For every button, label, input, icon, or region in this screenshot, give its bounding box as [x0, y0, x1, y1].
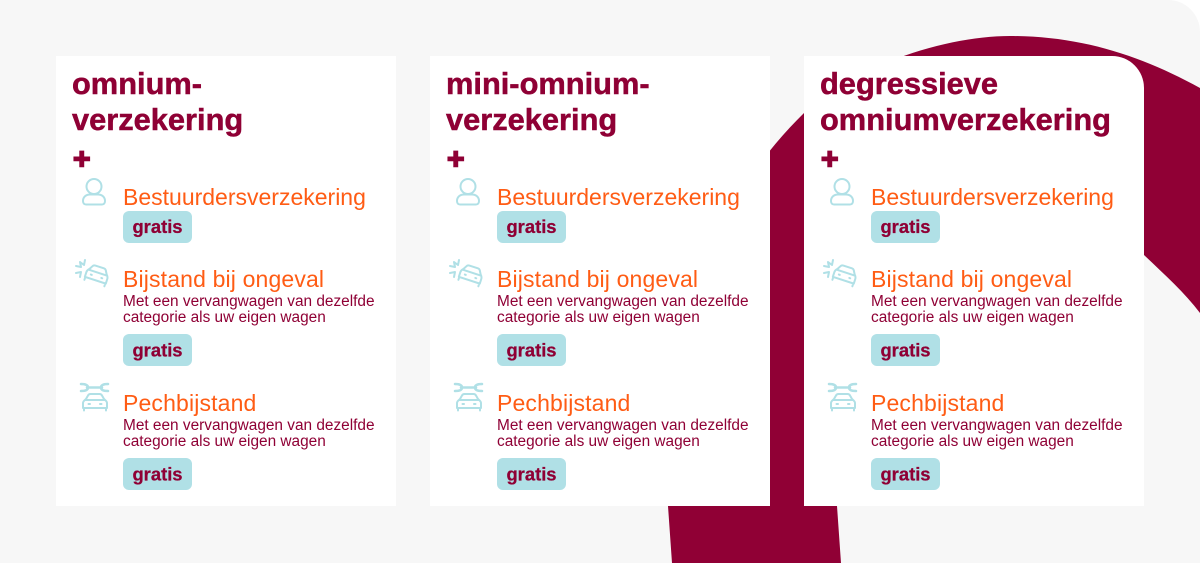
- description: Met een vervangwagen van dezelfde: [123, 293, 375, 310]
- description: Met een vervangwagen van dezelfde: [497, 293, 749, 310]
- panel: degressieve omniumverzekering: [804, 56, 1144, 506]
- badge: gratis: gratis: [880, 340, 931, 360]
- label: Pechbijstand: Pechbijstand: [871, 390, 1004, 416]
- icon: driver: [457, 179, 479, 204]
- icon: car accident: [450, 260, 484, 286]
- description: Met een vervangwagen van dezelfde: [871, 417, 1123, 434]
- label: Bestuurdersverzekering: Bestuurdersverzekering: [123, 184, 366, 210]
- badge: gratis: gratis: [132, 216, 183, 237]
- label: Bijstand bij ongeval: Bijstand bij ongeval: [871, 266, 1072, 292]
- plus sign: +: [447, 143, 465, 176]
- decorative maroon arc: [668, 36, 1200, 563]
- label: Pechbijstand: Pechbijstand: [123, 390, 256, 416]
- description: Met een vervangwagen van dezelfde: [871, 293, 1123, 310]
- heading: mini-omniumverzekering: mini-omnium-: [446, 66, 650, 101]
- badge: gratis: [123, 458, 192, 490]
- description: categorie als uw eigen wagen: [871, 309, 1074, 326]
- icon: car accident: [824, 260, 858, 286]
- badge: gratis: gratis: [506, 340, 557, 360]
- badge: gratis: gratis: [506, 216, 557, 237]
- heading: degressieve omniumverzekering: degressieve: [820, 66, 998, 101]
- description: Met een vervangwagen van dezelfde: [123, 417, 375, 434]
- badge: gratis: gratis: [880, 464, 931, 484]
- description: Met een vervangwagen van dezelfde: [497, 417, 749, 434]
- panel: mini-omniumverzekering: [430, 56, 770, 506]
- badge: gratis: gratis: [880, 216, 931, 237]
- label: Bestuurdersverzekering: Bestuurdersverzekering: [497, 184, 740, 210]
- plus sign: +: [821, 143, 839, 176]
- icon: car accident: [76, 260, 110, 286]
- panel: omniumverzekering: [56, 56, 396, 506]
- badge: gratis: gratis: [506, 464, 557, 484]
- badge: gratis: [497, 211, 566, 243]
- description: categorie als uw eigen wagen: [123, 309, 326, 326]
- description: categorie als uw eigen wagen: [871, 433, 1074, 450]
- icon: car repair: [455, 384, 482, 410]
- badge: gratis: [123, 211, 192, 243]
- badge: gratis: [871, 334, 940, 366]
- badge: gratis: [123, 334, 192, 366]
- heading: degressieve omniumverzekering: omniumverzekering: [820, 102, 1111, 137]
- plus sign: +: [73, 143, 91, 176]
- icon: driver: [831, 179, 853, 204]
- description: categorie als uw eigen wagen: [497, 309, 700, 326]
- badge: gratis: [871, 211, 940, 243]
- description: categorie als uw eigen wagen: [497, 433, 700, 450]
- icon: car repair: [81, 384, 108, 410]
- label: Bijstand bij ongeval: Bijstand bij ongeval: [497, 266, 698, 292]
- badge: gratis: [497, 334, 566, 366]
- label: Pechbijstand: Pechbijstand: [497, 390, 630, 416]
- icon: car repair: [829, 384, 856, 410]
- description: categorie als uw eigen wagen: [123, 433, 326, 450]
- icon: driver: [83, 179, 105, 204]
- badge: gratis: gratis: [132, 464, 183, 484]
- heading: omniumverzekering: verzekering: [72, 102, 243, 137]
- heading: omniumverzekering: omnium-: [72, 66, 202, 101]
- heading: mini-omniumverzekering: verzekering: [446, 102, 617, 137]
- label: Bestuurdersverzekering: Bestuurdersverzekering: [871, 184, 1114, 210]
- label: Bijstand bij ongeval: Bijstand bij ongeval: [123, 266, 324, 292]
- badge: gratis: [497, 458, 566, 490]
- badge: gratis: gratis: [132, 340, 183, 360]
- badge: gratis: [871, 458, 940, 490]
